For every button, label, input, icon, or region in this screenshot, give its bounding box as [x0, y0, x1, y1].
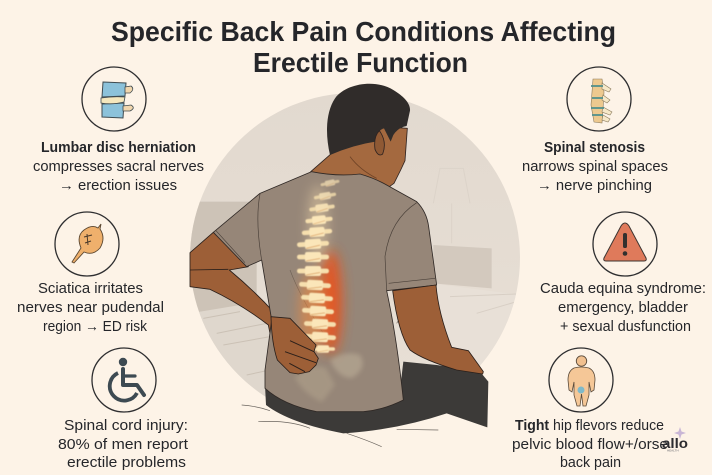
pelvis bones: [295, 353, 363, 402]
text: cauda equina syndrome: emergency, bladder: [558, 300, 688, 316]
text: lumbar disc herniation: Lumbar disc herniation: [41, 140, 196, 156]
text: lumbar disc herniation: [33, 140, 204, 194]
background circle: bedroom scene: [190, 93, 520, 423]
bed creases: [242, 405, 438, 447]
right arm: [393, 285, 483, 374]
text: spinal cord injury: 80% of men report: [58, 437, 188, 453]
panel: spinal stenosis: [522, 67, 668, 194]
neck shading: [350, 157, 377, 178]
icon: spine segment: [567, 67, 631, 131]
icon: lumbar vertebrae: [82, 67, 146, 131]
text: spinal stenosis: Spinal stenosis: [544, 140, 645, 156]
spine glow: [320, 250, 342, 354]
icon: nerve bulb: [55, 212, 119, 276]
panel: lumbar disc herniation: [33, 67, 204, 194]
icon: wheelchair: [92, 348, 156, 412]
spine vertebrae: [297, 178, 340, 353]
text: sciatica: region → ED risk: [43, 319, 148, 335]
text: sciatica: Sciatica irritates: [38, 281, 143, 297]
text: spinal stenosis: narrows spinal spaces: [522, 159, 668, 175]
logo: allo health: HEALTH: [667, 448, 679, 452]
title: Erectile Function: [253, 47, 468, 78]
text: tight hip flexors: back pain: [560, 455, 621, 471]
text: spinal stenosis: → nerve pinching: [537, 178, 652, 194]
title: Specific Back Pain Conditions Affecting: [111, 16, 616, 47]
text: lumbar disc herniation: → erection issues: [59, 178, 177, 194]
hand over lower back: [271, 317, 318, 374]
panel: sciatica: [17, 212, 164, 335]
logo: allo health: [662, 427, 688, 452]
text: tight hip flexors: Tight hip flevors reduce: [515, 418, 664, 434]
text: cauda equina syndrome: + sexual dusfunction: [560, 319, 691, 335]
text: tight hip flexors: pelvic blood flow+/orse: [512, 437, 668, 453]
icon: warning triangle: [593, 212, 657, 276]
man figure: [190, 84, 488, 433]
panel: tight hip flexors: [512, 348, 668, 471]
panel: spinal cord injury: [58, 348, 188, 471]
text: spinal cord injury: [58, 418, 188, 471]
text: lumbar disc herniation: compresses sacral nerves: [33, 159, 204, 175]
title: [111, 16, 616, 78]
text: sciatica: [17, 281, 164, 335]
hair: [327, 84, 410, 155]
panel: cauda equina syndrome: [540, 212, 706, 335]
text: spinal cord injury: erectile problems: [67, 455, 186, 471]
arm crease: [190, 268, 228, 271]
text: spinal stenosis: [522, 140, 668, 194]
text: tight hip flexors: [512, 418, 668, 471]
left arm: [190, 232, 318, 374]
shirt folds: [216, 194, 435, 291]
ear: [375, 131, 384, 155]
text: cauda equina syndrome: Cauda equina syndrome:: [540, 281, 706, 297]
icon: body with pelvis highlight: [549, 348, 613, 412]
shirt: [213, 172, 437, 412]
central illustration: man with glowing spine: [190, 84, 520, 447]
text: sciatica: nerves near pudendal: [17, 300, 164, 316]
neck and face: [311, 127, 407, 187]
text: spinal cord injury: Spinal cord injury:: [64, 418, 188, 434]
pants: [265, 362, 488, 433]
logo: allo health: allo: [662, 435, 688, 451]
text: cauda equina syndrome: [540, 281, 706, 335]
